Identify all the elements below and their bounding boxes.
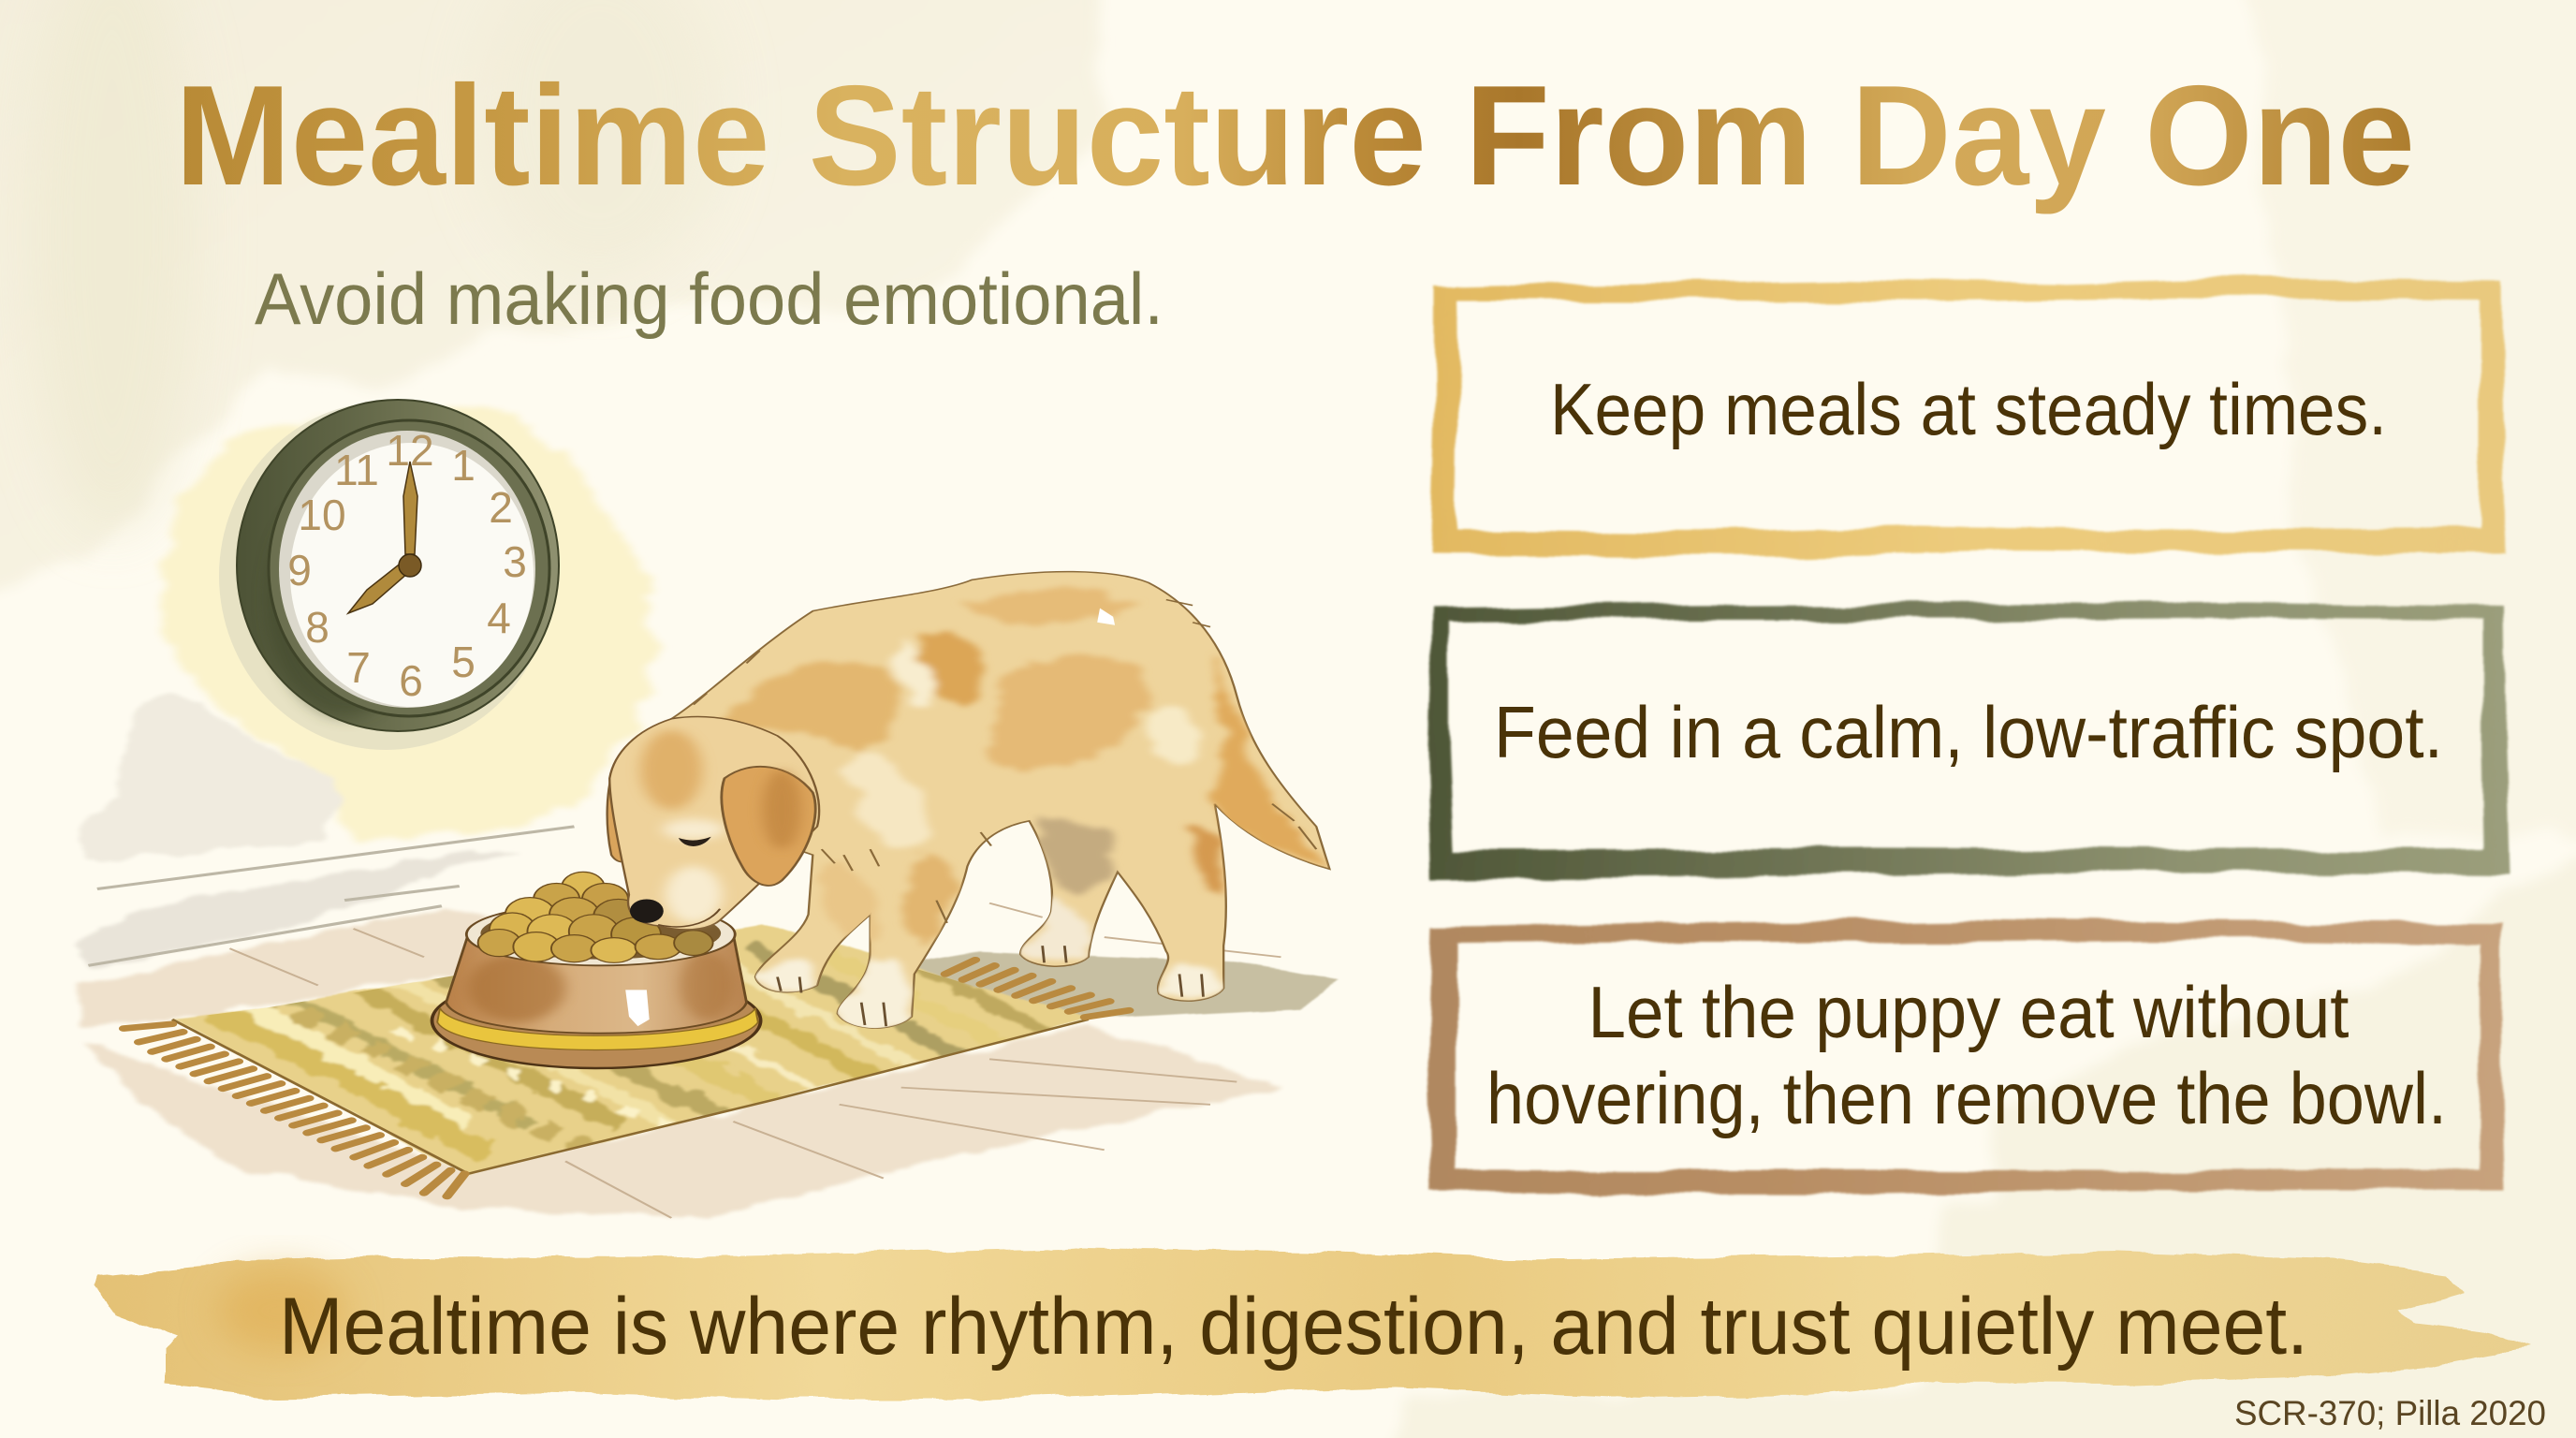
grey wall wash [81, 694, 344, 860]
clock inner lip [269, 420, 549, 716]
source citation: SCR-370; Pilla 2020 [2234, 1394, 2546, 1432]
puppy far ear [607, 764, 636, 862]
clock hands [403, 462, 417, 554]
puppy nose [630, 899, 664, 923]
clock numerals: 4 [487, 594, 511, 642]
takeaway banner [95, 1248, 2530, 1400]
clock numerals: 5 [451, 638, 476, 686]
title: Mealtime Structure From Day One [175, 56, 2415, 215]
clock numerals: 9 [287, 546, 312, 594]
clock numerals: 2 [489, 483, 513, 532]
card: calm spot: Feed in a calm, low-traffic spot. [1494, 691, 2443, 773]
rug [124, 923, 1188, 1196]
food bowl [432, 872, 761, 1068]
floor [75, 909, 1281, 1218]
takeaway banner: Mealtime is where rhythm, digestion, and trust quietly meet. [279, 1282, 2308, 1372]
floor shadow under puppy [760, 951, 1334, 1036]
card: steady times: Keep meals at steady times. [1550, 368, 2387, 450]
clock numerals: 11 [334, 446, 379, 494]
kibble [478, 872, 713, 962]
clock face [290, 443, 534, 707]
clock wall shadow [219, 402, 552, 750]
card: eat without hovering: Let the puppy eat without [1588, 971, 2349, 1053]
card: eat without hovering [1427, 919, 2505, 1195]
puppy fur strokes [694, 600, 1316, 923]
puppy eating from bowl [432, 572, 1329, 1068]
clock numerals [287, 426, 527, 705]
clock numerals: 1 [451, 441, 476, 490]
subtitle: Avoid making food emotional. [255, 257, 1164, 340]
clock numerals: 7 [346, 643, 371, 692]
rug fringe [124, 960, 1129, 1196]
puppy near ear [722, 767, 815, 886]
clock numerals: 3 [503, 537, 527, 586]
illustration backdrop: wall glow, wall wash, floor and rug [75, 407, 1334, 1218]
yellow glow behind clock [163, 407, 655, 844]
puppy body [671, 572, 1329, 1028]
clock numerals: 8 [305, 603, 329, 652]
puppy eye [679, 837, 711, 846]
card: steady times [1430, 278, 2507, 556]
wall clock [219, 400, 559, 750]
baseboard [75, 849, 521, 965]
card: calm spot [1428, 603, 2509, 878]
clock numerals: 10 [298, 491, 346, 539]
puppy paws toe lines [778, 946, 1203, 1026]
puppy head [609, 717, 819, 930]
card: eat without hovering: hovering, then remove the bowl. [1486, 1057, 2447, 1139]
clock outer frame [237, 400, 559, 731]
clock numerals: 12 [386, 426, 434, 475]
clock numerals: 6 [399, 656, 423, 705]
